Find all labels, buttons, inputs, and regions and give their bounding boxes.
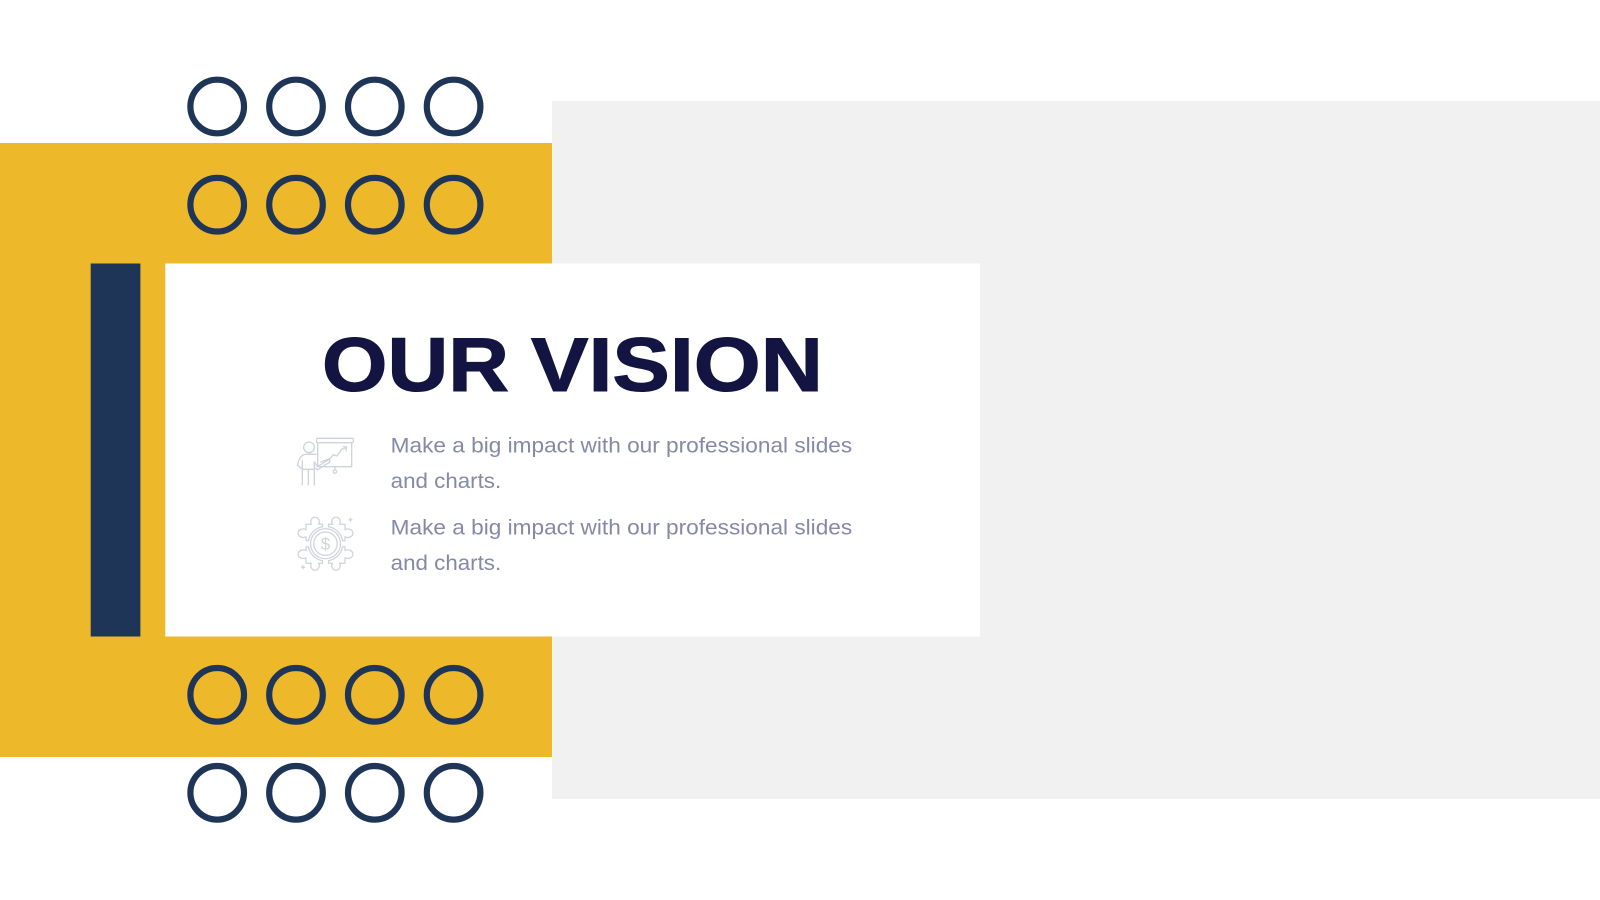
text block: first point: and charts. (391, 470, 501, 493)
circle grid: top (190, 80, 480, 232)
panel: white content card (165, 264, 980, 636)
icon: presenter with chart (297, 438, 353, 485)
title: VISION (531, 323, 823, 408)
text block: second point: Make a big impact with our professional slides (391, 516, 852, 539)
text block: first point (391, 434, 852, 493)
title (322, 323, 823, 408)
navy vertical bar (91, 264, 140, 636)
text block: second point: and charts. (391, 552, 501, 575)
icon: gears with dollar: $ (321, 535, 331, 554)
text block: first point: Make a big impact with our professional slides (391, 434, 852, 457)
icon: gears with dollar (298, 517, 353, 570)
title: OUR (322, 323, 509, 408)
panel: grey background block (552, 101, 1600, 799)
circle grid: bottom (190, 668, 480, 820)
panel: yellow block (0, 143, 552, 757)
text block: second point (391, 516, 852, 575)
